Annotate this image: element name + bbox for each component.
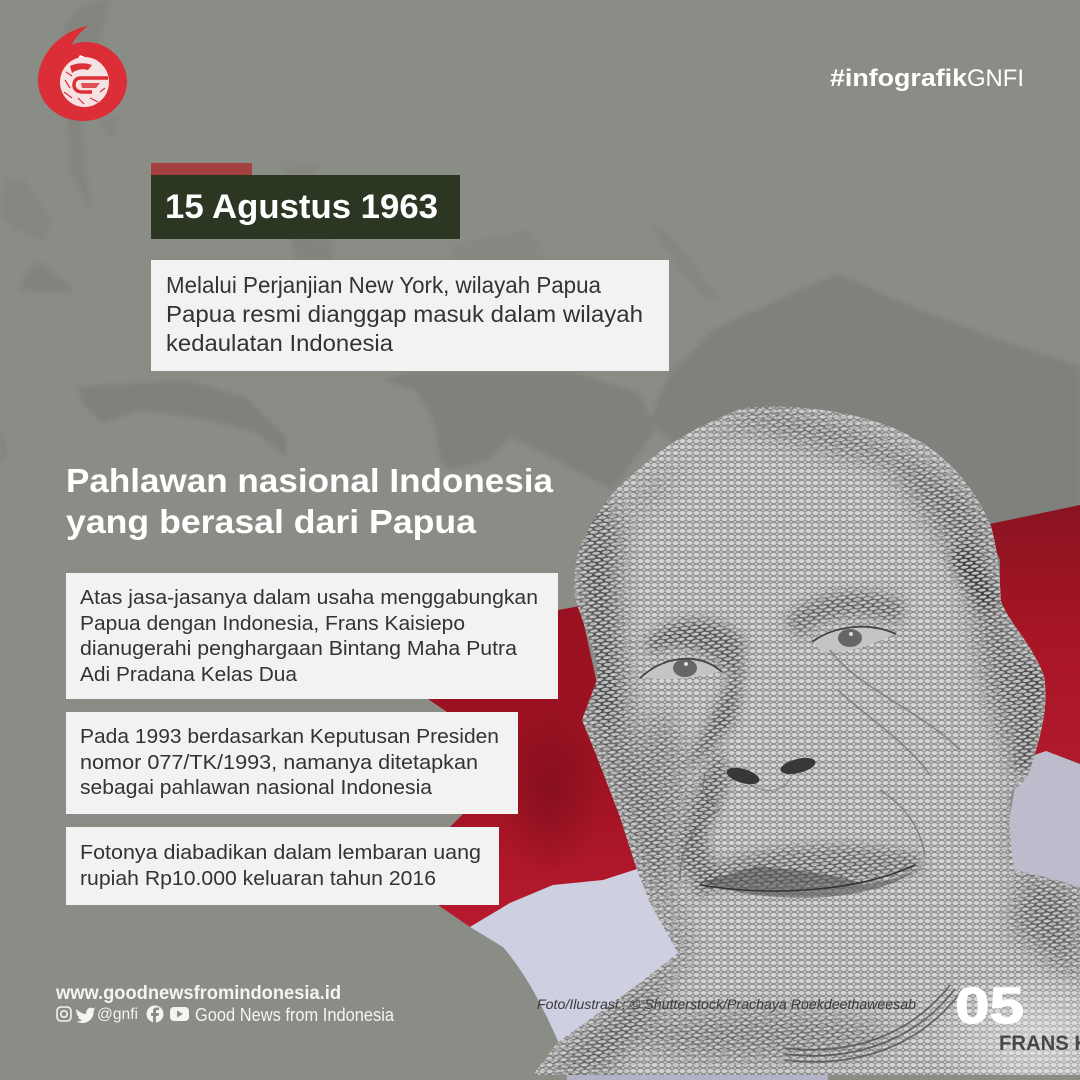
icon: instagram bbox=[57, 1007, 71, 1021]
panel: national hero decree bbox=[66, 712, 518, 814]
nose and cheek lines bbox=[680, 650, 960, 880]
panel: award: Papua dengan Indonesia, Frans Kaisiepo bbox=[80, 612, 465, 635]
panel: New York Agreement: Melalui Perjanjian New York, wilayah Papua bbox=[166, 272, 602, 298]
footer: website and social media: Good News from Indonesia bbox=[195, 1005, 395, 1025]
section heading: yang berasal dari Papua bbox=[66, 503, 477, 540]
date heading: 15 Agustus 1963 bbox=[165, 188, 438, 226]
panel: award: dianugerahi penghargaan Bintang Maha Putra bbox=[80, 637, 518, 660]
panel: New York Agreement bbox=[151, 260, 669, 371]
photo credit: Foto/Ilustrasi : © Shutterstock/Prachaya Roekdeethaweesab bbox=[537, 997, 917, 1012]
icon: youtube bbox=[170, 1007, 189, 1021]
panel: banknote: rupiah Rp10.000 keluaran tahun 2016 bbox=[80, 867, 436, 890]
section heading: Pahlawan nasional Indonesia bbox=[66, 462, 554, 499]
footer: website and social media: www.goodnewsfromindonesia.id bbox=[55, 983, 341, 1004]
panel: banknote: Fotonya diabadikan dalam lembaran uang bbox=[80, 841, 481, 864]
right eye bbox=[812, 627, 896, 653]
panel: national hero decree: Pada 1993 berdasarkan Keputusan Presiden bbox=[80, 725, 499, 748]
footer: website and social media bbox=[55, 983, 395, 1025]
panel: New York Agreement: Papua resmi dianggap masuk dalam wilayah bbox=[166, 301, 643, 327]
panel: award: Adi Pradana Kelas Dua bbox=[80, 663, 298, 686]
footer: website and social media: @gnfi bbox=[97, 1006, 138, 1023]
flag white stripe, lower left bbox=[470, 868, 700, 1045]
panel: national hero decree: sebagai pahlawan nasional Indonesia bbox=[80, 776, 433, 799]
icon: twitter bbox=[76, 1008, 95, 1023]
portrait of Frans Kaisiepo bbox=[530, 400, 1080, 1080]
logo bbox=[38, 26, 127, 121]
Indonesian flag behind portrait bbox=[428, 505, 1080, 1045]
bottom edge strip bbox=[567, 1075, 828, 1080]
section heading bbox=[66, 462, 554, 540]
jaw curves bbox=[785, 985, 960, 1062]
left eye bbox=[640, 659, 722, 679]
icon: facebook bbox=[146, 1006, 164, 1023]
hashtag bbox=[830, 65, 1024, 92]
flag red stripe, right bbox=[985, 505, 1080, 770]
panel: New York Agreement: kedaulatan Indonesia bbox=[166, 330, 394, 356]
logo eagle emblem bbox=[60, 55, 109, 107]
facial features bbox=[640, 627, 960, 1062]
nostrils bbox=[726, 758, 816, 784]
background map of Papua and surrounding islands bbox=[0, 0, 1080, 600]
panel: award bbox=[66, 573, 558, 699]
hashtag: GNFI bbox=[967, 65, 1024, 92]
lighter lower right banknote corner bbox=[946, 980, 1080, 1075]
panel: award: Atas jasa-jasanya dalam usaha menggabungkan bbox=[80, 586, 538, 609]
date heading bbox=[151, 163, 460, 239]
mouth bbox=[700, 862, 924, 898]
panel: banknote bbox=[66, 827, 499, 905]
hashtag: #infografik bbox=[830, 65, 968, 92]
page number: 05 bbox=[955, 977, 1024, 1034]
flag white stripe, right bbox=[1000, 751, 1080, 890]
panel: national hero decree: nomor 077/TK/1993, namanya ditetapkan bbox=[80, 751, 478, 774]
flag red stripe, left bbox=[428, 606, 640, 927]
